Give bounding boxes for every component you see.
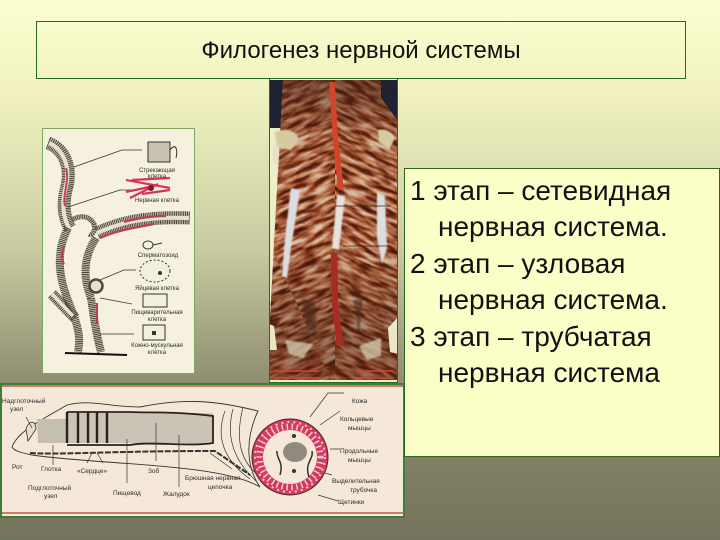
worm labels xyxy=(2,397,380,506)
worm labels: трубочка xyxy=(350,486,377,494)
worm labels: Кожа xyxy=(352,398,368,405)
title box: Филогенез нервной системы xyxy=(201,37,521,64)
text panel: stages: нервная система. xyxy=(438,284,668,315)
worm labels: Надглоточный xyxy=(2,397,46,405)
text panel: stages: 2 этап – узловая xyxy=(410,248,625,279)
worm body xyxy=(12,393,344,501)
panel: hydra diagram xyxy=(42,128,195,374)
worm labels: Пищевод xyxy=(113,490,141,497)
worm labels: Брюшная нервная xyxy=(185,475,241,482)
cell icons and captions xyxy=(126,142,183,356)
worm labels: Щетинки xyxy=(338,499,365,506)
cell icons and captions: Нервная клетка xyxy=(135,198,180,204)
title box xyxy=(36,21,686,79)
worm labels: Кольцевые xyxy=(340,416,374,423)
worm labels: мышцы xyxy=(348,425,371,432)
cell icons and captions: клетка xyxy=(148,350,167,356)
worm labels: узел xyxy=(44,493,58,500)
text panel: stages: 3 этап – трубчатая xyxy=(410,321,652,352)
worm labels: мышцы xyxy=(348,457,371,464)
worm labels: Глотка xyxy=(41,466,61,473)
leader lines xyxy=(26,393,344,501)
worm labels: Подглоточный xyxy=(28,484,72,492)
leader lines xyxy=(68,150,142,334)
text panel: stages: 1 этап – сетевидная xyxy=(410,175,671,206)
dark background top xyxy=(270,80,397,128)
cell icons and captions: клетка xyxy=(148,317,167,323)
cell icons and captions: Кожно-мускульная xyxy=(131,343,183,349)
torso xyxy=(269,80,398,380)
hydra body xyxy=(48,143,190,355)
worm labels: Жалудок xyxy=(163,491,190,498)
text panel: stages: нервная система. xyxy=(438,211,668,242)
panel: earthworm diagram xyxy=(0,383,405,518)
cell icons and captions: Пищеварительная xyxy=(131,310,183,316)
cell icons and captions: Яйцевая клетка xyxy=(135,285,180,292)
text panel: stages xyxy=(404,168,720,457)
worm labels: Рот xyxy=(12,464,23,471)
cell icons and captions: клетка xyxy=(148,174,167,180)
panel: dissected spinal cord photo xyxy=(269,79,398,383)
cell icons and captions: Сперматозоид xyxy=(138,253,179,259)
worm cross-section xyxy=(252,419,328,495)
worm labels: цепочка xyxy=(208,484,233,491)
cell icons and captions: Стрекающая xyxy=(139,168,175,174)
worm labels: Выделительная xyxy=(332,478,380,485)
worm labels: Зоб xyxy=(148,467,160,475)
worm labels: Продольные xyxy=(340,448,378,455)
worm labels: «Сердце» xyxy=(77,468,107,475)
worm labels: узел xyxy=(10,406,24,413)
text panel: stages: нервная система xyxy=(438,357,660,388)
